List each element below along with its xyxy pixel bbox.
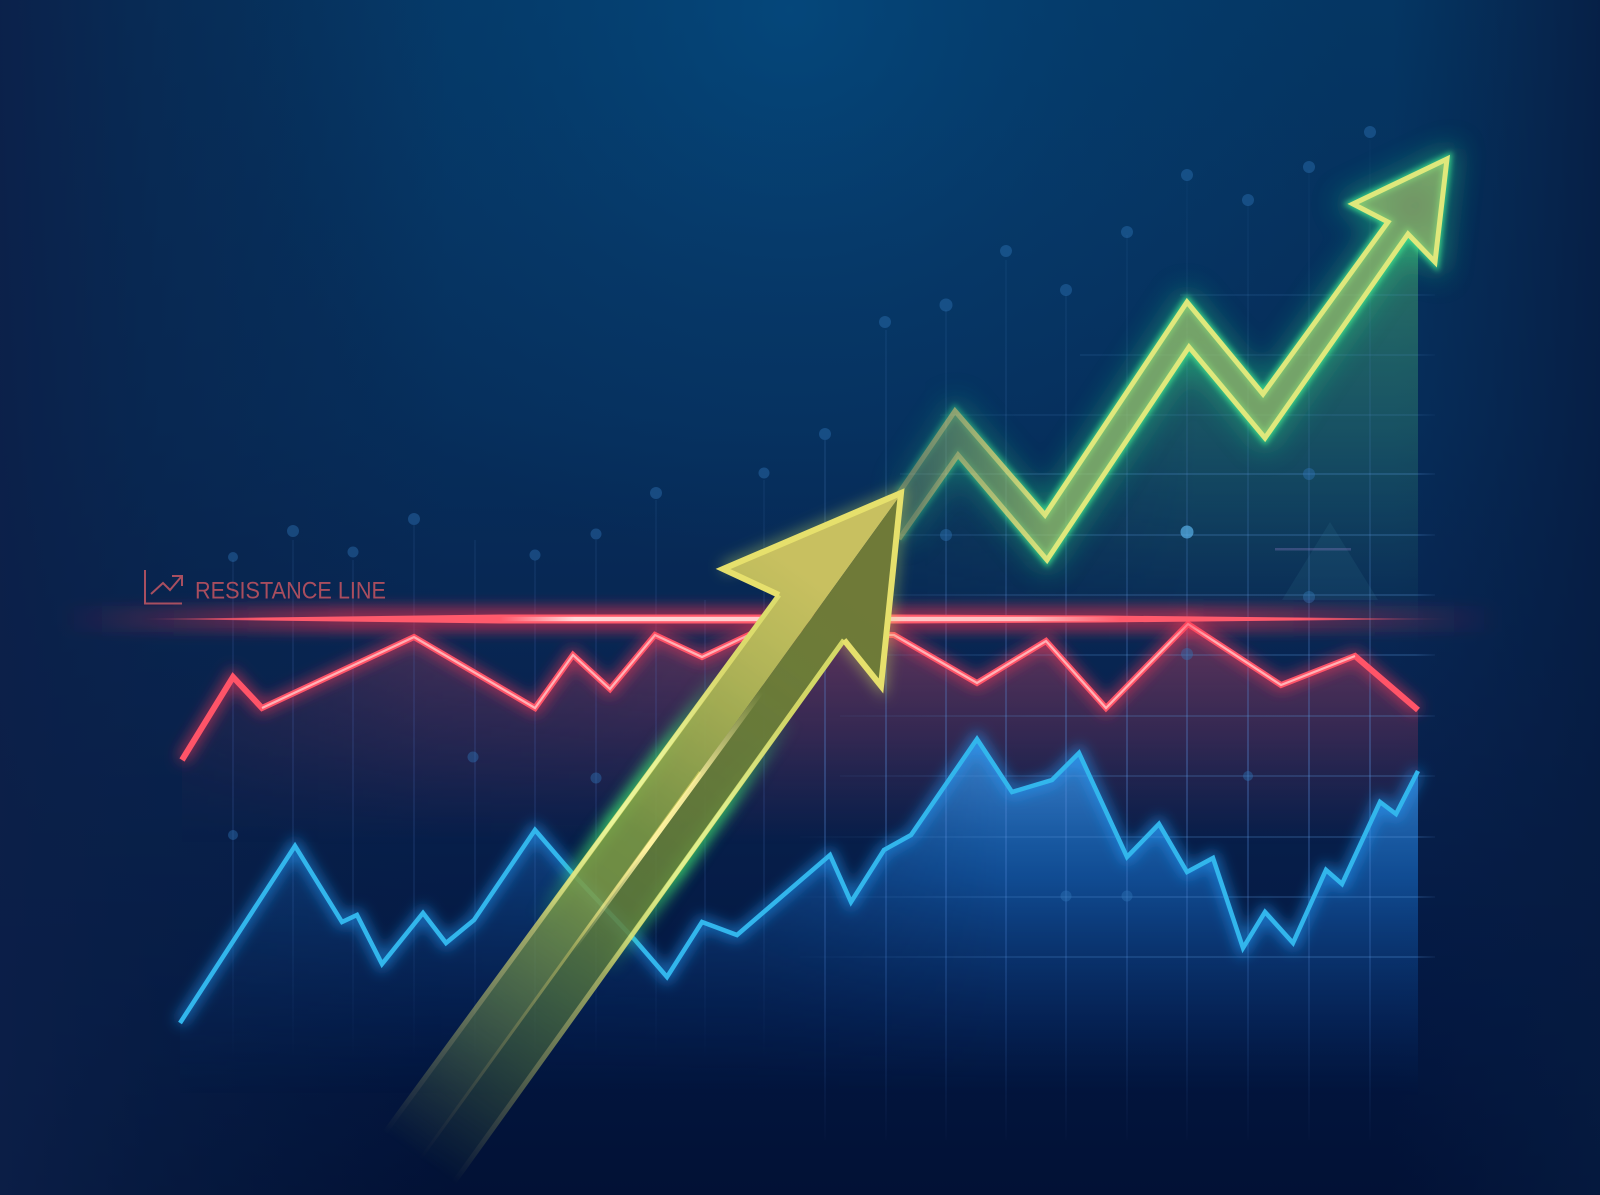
data dots [228,126,1376,902]
arrow glow [723,493,901,686]
faint triangle marker [1275,522,1378,600]
shaft glow [540,672,790,969]
arrow body [350,493,901,1195]
red price line [182,624,1418,760]
resistance line label: RESISTANCE LINE [195,578,386,604]
resistance line label [145,570,386,604]
resistance line [60,606,1500,632]
icon: line chart [145,570,182,604]
filled area under blue line [204,744,1418,1058]
blue price line [180,739,1418,1023]
grid lines [233,140,1435,1140]
filled area under red line [196,628,1418,820]
yellow breakout arrow [350,493,901,1195]
filled area under green arrow [916,238,1418,592]
green rising arrow [899,159,1447,560]
shaft highlights [546,684,778,960]
